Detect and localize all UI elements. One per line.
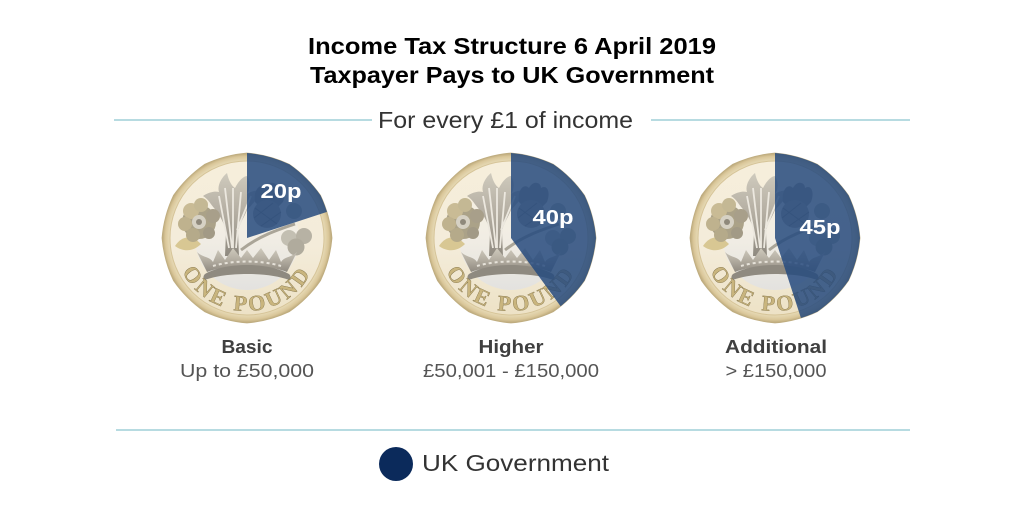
icon: pound coin with 45p share: ONE POUND: [712, 267, 836, 311]
panel: basic rate: [162, 152, 332, 381]
legend: [379, 447, 610, 481]
range: higher: £50,001 - £150,000: [423, 361, 599, 381]
icon: pound coin with 45p share: 45p: [800, 217, 840, 239]
subtitle: for every pound of income: For every £1 of income: [378, 107, 633, 133]
range: basic: Up to £50,000: [180, 361, 314, 381]
label: additional: Additional: [725, 337, 827, 357]
range: additional: > £150,000: [726, 361, 826, 381]
icon: pound coin with 20p share: [162, 152, 332, 324]
icon: pound coin with 45p share: [690, 152, 860, 324]
title: Taxpayer Pays to UK Government: [310, 62, 714, 88]
legend swatch: [379, 447, 413, 481]
title: [308, 33, 716, 88]
title: Income Tax Structure 6 April 2019: [308, 33, 716, 59]
icon: pound coin with 20p share: ONE POUND: [184, 267, 308, 311]
label: basic: Basic: [222, 337, 272, 357]
icon: pound coin with 40p share: 40p: [532, 207, 574, 229]
panel: additional rate: [690, 152, 860, 381]
panel: higher rate: [423, 152, 599, 381]
icon: pound coin with 40p share: [426, 152, 596, 324]
icon: pound coin with 40p share: ONE POUND: [448, 267, 572, 311]
icon: pound coin with 20p share: 20p: [260, 181, 302, 203]
legend label: UK Government: [422, 450, 610, 476]
label: higher: Higher: [478, 337, 544, 357]
